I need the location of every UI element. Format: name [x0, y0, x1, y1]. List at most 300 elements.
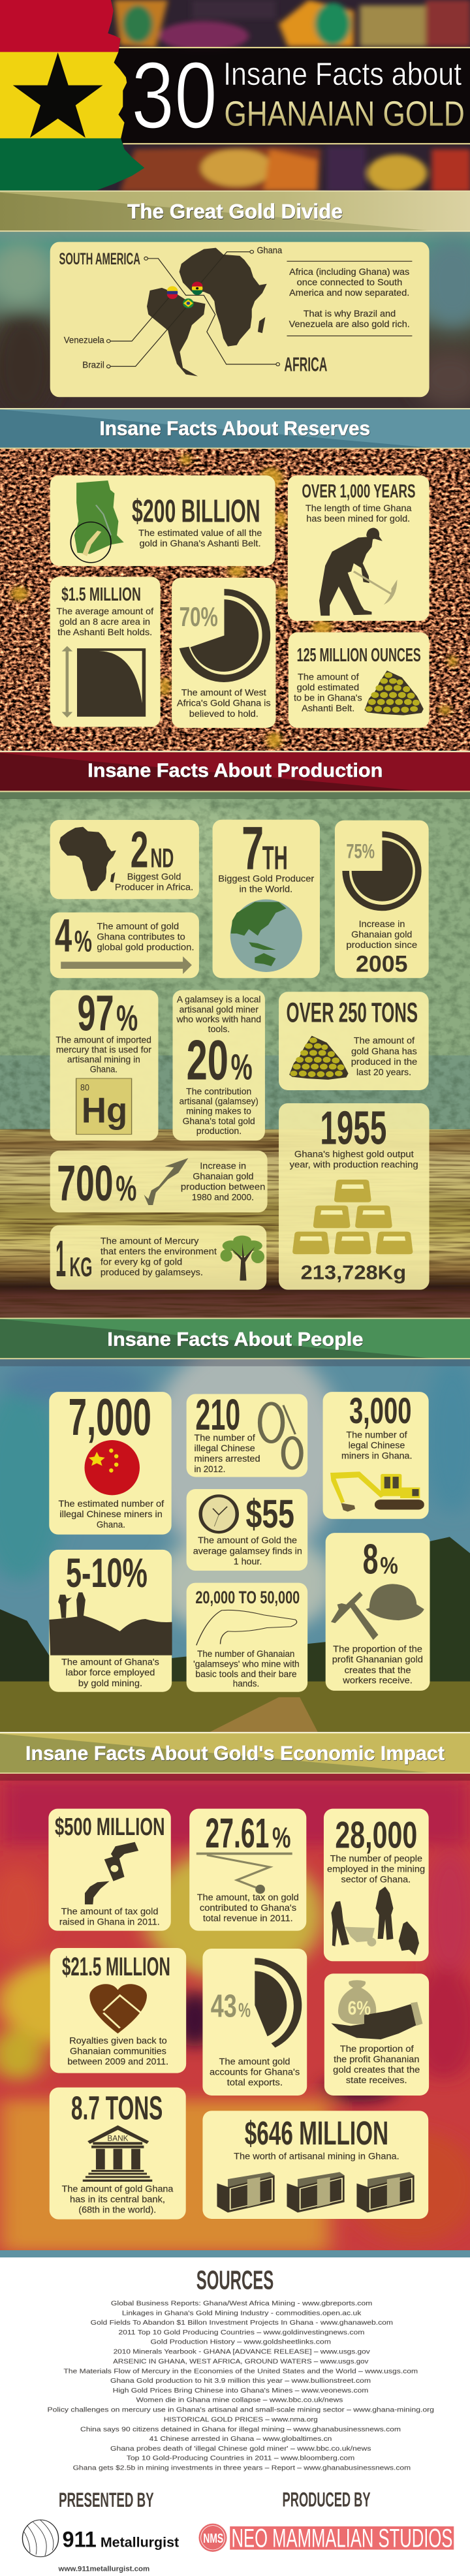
sources list: Top 10 Gold-Producing Countries in 2011 – www.bloomberg.com [127, 2454, 354, 2462]
callout lines [106, 250, 279, 368]
text: Increase in [359, 919, 405, 929]
text: Ghana's total gold [183, 1116, 255, 1126]
number: 70% [180, 602, 218, 633]
text: 1980 and 2000. [192, 1193, 254, 1202]
panel: 75%: 75% [346, 840, 375, 863]
number [57, 1155, 136, 1212]
icon: gold bars [292, 1180, 413, 1254]
icon: gold pile [289, 1036, 349, 1080]
panel: 2nd: ND [151, 842, 174, 873]
sources list: HISTORICAL GOLD PRICES – www.nma.org [164, 2415, 318, 2423]
gold nugget background [0, 448, 470, 753]
band: Insane Facts About People: Insane Facts About People [107, 1328, 364, 1350]
text: The amount of [354, 1036, 415, 1046]
flag: Ghana [192, 281, 202, 295]
number: 7 [242, 814, 264, 883]
text: the Ashanti Belt holds. [57, 628, 152, 637]
icon: money bag and hand: 6% [348, 1997, 371, 2019]
text [62, 2184, 174, 2215]
number: 4 [55, 909, 72, 962]
text [180, 1087, 258, 1136]
text [59, 1500, 164, 1530]
icon: China flag [84, 1440, 140, 1495]
text [346, 919, 417, 950]
icon: gold pile [364, 670, 424, 715]
text: The amount of [298, 672, 359, 682]
text: Ghanaian gold [193, 1172, 253, 1182]
text: The amount of Gold the [198, 1536, 297, 1546]
sources list: 41 Chinese arrested in Ghana – www.globaltimes.cn [149, 2435, 332, 2442]
text [290, 1150, 418, 1170]
panel: 700%: % [116, 1169, 136, 1208]
number: 43 [211, 1987, 237, 2024]
band: Insane Facts About People [0, 1318, 470, 1359]
text block: explanation: Venezuela are also gold rich. [289, 320, 410, 330]
text: The amount of imported [55, 1035, 151, 1045]
title band [111, 47, 470, 144]
band: The Great Gold Divide [0, 191, 470, 232]
title text [131, 42, 465, 148]
text block: explanation: Africa (including Ghana) was [289, 268, 409, 277]
panel: 210: 210 [195, 1390, 240, 1439]
text [56, 607, 154, 637]
text [195, 1433, 260, 1474]
text: The estimated number of [59, 1500, 164, 1509]
sources list [48, 2299, 434, 2472]
text: gold creates that the [333, 2065, 420, 2075]
text: artisanal mining in [67, 1055, 140, 1065]
map: South America [147, 288, 206, 376]
text: the profit Ghananian [334, 2054, 419, 2064]
text [351, 1036, 417, 1077]
text: Ghana. [90, 1065, 118, 1075]
number: 5-10% [66, 1550, 148, 1596]
text: mercury that is used for [56, 1045, 151, 1055]
text [306, 504, 412, 524]
text: The number of [346, 1430, 407, 1440]
panel: 27.61% [189, 1809, 306, 1931]
text block: explanation: America and now separated. [289, 289, 409, 298]
icon: miner [319, 528, 397, 616]
title text: 30 [131, 42, 217, 148]
text: The amount of Mercury [101, 1236, 199, 1246]
text: Biggest Gold [127, 872, 181, 882]
panel: over 250 tons [279, 992, 429, 1090]
panel: 70% [172, 578, 275, 728]
text: for every kg of gold [101, 1257, 182, 1267]
text: gold Ghana has [351, 1046, 417, 1056]
text: gold estimated [297, 683, 359, 693]
panel: 7th: TH [262, 840, 288, 877]
text: The amount of gold Ghana [62, 2184, 174, 2194]
text [101, 1236, 217, 1278]
star [13, 52, 103, 138]
website: www.911metallurgist.com [58, 2564, 149, 2573]
text block: explanation [287, 261, 412, 336]
gold bars background [0, 1773, 470, 2252]
sources list: Global Business Reports: Ghana/West Africa Mining - www.gbreports.com [111, 2299, 372, 2307]
panel: 1955 [279, 1101, 430, 1290]
panel: 7th [213, 814, 320, 978]
text [332, 1644, 423, 1686]
sources list: Gold Production History – www.goldsheetlinks.com [151, 2338, 331, 2346]
aerial city background [0, 230, 470, 418]
number: 2 [131, 821, 148, 879]
text [193, 1536, 302, 1567]
icon: Hg element [76, 1078, 132, 1135]
text: Ghana contributes to [97, 932, 185, 942]
text: by gold mining. [78, 1679, 142, 1688]
section: reserves [0, 408, 470, 753]
number: 213,728Kg [301, 1261, 406, 1283]
text: The amount gold [219, 2057, 290, 2067]
dividing line [148, 259, 275, 364]
logo: 911 Metallurgist: Metallurgist [101, 2535, 180, 2551]
text: definition: who works with hand [176, 1014, 261, 1024]
text: in 2012. [195, 1465, 225, 1474]
text [115, 872, 193, 892]
panel: 125 million ounces [289, 633, 430, 728]
text: The average amount of [56, 607, 154, 617]
text: The amount, tax on gold [197, 1893, 299, 1902]
panel: 700% [50, 1151, 268, 1212]
panel: 1kg [50, 1225, 266, 1290]
text: last 20 years. [356, 1067, 411, 1077]
paper and wood background [0, 791, 470, 1319]
text: profit Ghananian gold [332, 1655, 423, 1665]
text: labor force employed [66, 1668, 155, 1678]
arrow: growth [144, 1158, 188, 1205]
panel: 7,000 [49, 1389, 172, 1535]
number: 20 [187, 1028, 228, 1092]
icon: heart handshake [89, 1984, 147, 2034]
text: legal Chinese [349, 1441, 405, 1451]
year: 2005 [356, 951, 408, 977]
icon: cash bundles [217, 2172, 415, 2212]
icon: Hg element: Hg [82, 1090, 127, 1131]
section: sources and credits: PRESENTED BY [59, 2489, 154, 2511]
text: basic tools and their bare [195, 1670, 297, 1679]
panel: 1kg: KG [70, 1251, 92, 1282]
header banner [0, 0, 470, 192]
panel: $21.5 million: $21.5 MILLION [62, 1953, 170, 1981]
band: Insane Facts About Reserves [0, 408, 470, 448]
text: definition [176, 995, 261, 1034]
panel: 43% [202, 1949, 307, 2096]
logo: Neo Mammalian Studios: NMS [203, 2532, 223, 2546]
text: accounts for Ghana's [210, 2067, 300, 2077]
icon: globe [230, 900, 302, 972]
text [210, 2057, 300, 2088]
chart: 75% pie [342, 831, 422, 911]
text [97, 922, 195, 952]
label: South America: SOUTH AMERICA [59, 249, 140, 268]
text: Ghana's highest gold output [294, 1150, 414, 1159]
text [294, 672, 362, 714]
panel: 20,000 to 50,000 [187, 1583, 307, 1692]
logo: 911 Metallurgist [22, 2520, 180, 2557]
flag: Venezuela [167, 286, 178, 299]
panel: 8% [326, 1533, 430, 1691]
icon: acre diagram [62, 646, 146, 717]
panel: $200 billion [50, 475, 275, 566]
panel: 97% mercury: % [116, 997, 138, 1039]
sky and field background [0, 1341, 470, 1735]
heading: $1.5 MILLION [61, 584, 141, 605]
section: people [0, 1318, 470, 1735]
number: % [380, 1552, 398, 1579]
text: Biggest Gold Producer [218, 874, 315, 884]
text: The contribution [186, 1087, 251, 1097]
text: artisanal (galamsey) [180, 1097, 258, 1107]
icon: money exchange [85, 1842, 138, 1904]
text: The amount of tax gold [61, 1907, 158, 1917]
icon: workers [331, 1887, 419, 1955]
sources list: 2011 Top 10 Gold Producing Countries – www.goldinvestingnews.com [118, 2329, 364, 2336]
text: to be in Ghana's [294, 693, 362, 703]
sources list: Linkages in Ghana's Gold Mining Industry - commodities.open.ac.uk [122, 2309, 362, 2317]
panel: over 1,000 years [288, 475, 430, 621]
text [333, 2044, 420, 2085]
teal strip [0, 2250, 470, 2257]
text: mining makes to [186, 1107, 251, 1116]
text: average galamsey finds in [193, 1547, 302, 1556]
text [61, 1657, 159, 1688]
text [177, 688, 271, 719]
text: raised in Ghana in 2011. [59, 1917, 160, 1927]
text: Africa's Gold Ghana is [177, 699, 271, 708]
text [67, 2036, 168, 2067]
text: hands. [233, 1679, 259, 1689]
icon: Ghana map with belt [70, 480, 124, 563]
text [55, 1035, 151, 1075]
number: $55 [246, 1491, 294, 1536]
icon: clock [200, 1496, 237, 1532]
sources list: China says 90 citizens detained in Ghana for illegal mining – www.ghanabusinessnews.com [80, 2425, 401, 2433]
panel: $1.5 million [50, 577, 161, 727]
icon: Hg element: 80 [80, 1082, 89, 1093]
icon: Africa [59, 827, 116, 891]
band: Insane Facts About Production [0, 751, 470, 792]
number: 3,000 [349, 1390, 411, 1431]
icon: handcuffs [260, 1404, 301, 1468]
text: creates that the [345, 1666, 411, 1675]
icon: money bag and hand [331, 1980, 422, 2039]
panel: galamsey 20%: % [231, 1046, 253, 1088]
text: The number of [195, 1433, 255, 1443]
sources list: The Materials Flow of Mercury in the Economies of the United States and the World – www.usgs.com [63, 2367, 418, 2375]
icon: tree [221, 1236, 264, 1281]
arrow [61, 956, 192, 974]
text [218, 874, 315, 894]
text: in the World. [239, 885, 292, 894]
panel: $646 million [202, 2111, 428, 2219]
text: believed to hold. [189, 710, 258, 719]
text: The amount of gold [97, 922, 179, 932]
text: production between [181, 1182, 265, 1192]
text: The proportion of the [333, 1644, 422, 1654]
text: has in its central bank, [70, 2195, 165, 2205]
number: 8 [363, 1535, 379, 1583]
text: sector of Ghana. [341, 1875, 411, 1885]
band: Insane Facts About Reserves: Insane Facts About Reserves [99, 418, 370, 439]
sources list: Women die in Ghana mine collapse – www.bbc.co.uk/news [136, 2396, 343, 2404]
section: great gold divide [0, 191, 470, 418]
text [341, 1430, 412, 1461]
text [59, 1907, 160, 1927]
sources list: ARSENIC IN GHANA, WEST AFRICA, GROUND WATERS – www.usgs.gov [113, 2357, 369, 2365]
text: 1 hour. [234, 1557, 262, 1567]
sources list: 2010 Minerals Yearbook - GHANA [ADVANCE RELEASE] – www.usgs.gov [114, 2348, 370, 2355]
text: Ashanti Belt. [302, 704, 354, 714]
text: definition: artisanal gold miner [180, 1005, 258, 1014]
text: total revenue in 2011. [203, 1913, 293, 1923]
text: employed in the mining [327, 1864, 425, 1874]
chart: decline line [196, 1853, 292, 1894]
text: contributed to Ghana's [200, 1903, 296, 1913]
country labels [64, 246, 282, 370]
panel: galamsey 20% [172, 990, 265, 1140]
number: 1 [55, 1230, 66, 1287]
text: The proportion of [340, 2044, 414, 2054]
text: miners arrested [195, 1454, 260, 1464]
sources list: Gold Fields To Abandon $1 Billon Investment Projects In Ghana - www.ghanaweb.com [91, 2319, 393, 2326]
text: Ghana. [97, 1520, 125, 1530]
label: Africa: AFRICA [284, 353, 327, 375]
text: Ghanaian gold [351, 930, 412, 939]
panel: 43%: % [238, 1998, 251, 2021]
map: Africa [180, 248, 267, 347]
panel: 3,000 [323, 1390, 429, 1519]
text: The amount of Ghana's [61, 1657, 159, 1667]
logo: 911 Metallurgist: 911 [63, 2527, 97, 2552]
text: definition: tools. [208, 1024, 230, 1034]
text: that enters the environment [101, 1247, 217, 1257]
heading: 20,000 TO 50,000 [195, 1588, 300, 1607]
panel: 75% [335, 821, 429, 978]
flag: Brazil [183, 298, 194, 308]
panel: $21.5 million [50, 1948, 186, 2073]
text: production since [346, 940, 417, 950]
text: illegal Chinese [195, 1444, 255, 1453]
text [197, 1893, 299, 1923]
text: definition: A galamsey is a local [177, 995, 261, 1005]
panel: $200 billion: $200 BILLION [132, 493, 260, 529]
panel: 6% [324, 1973, 429, 2096]
Ghana flag map [0, 0, 144, 191]
text: production. [196, 1126, 242, 1136]
text: 'galamseys' who mine with [193, 1659, 300, 1669]
text: The length of time Ghana [306, 504, 412, 513]
sources list: High Gold Prices Bring Chinese into Ghana's Mines – www.veonews.com [113, 2387, 368, 2394]
icon: miners on hill [49, 1592, 172, 1656]
panel: 5-10% [49, 1550, 172, 1692]
text: The estimated value of all the [138, 529, 262, 539]
panel: 8.7 tons [50, 2088, 186, 2220]
panel: 4% [50, 909, 199, 978]
country labels: Ghana [257, 246, 282, 256]
section: sources and credits: SOURCES [196, 2265, 274, 2295]
icon: bank [83, 2126, 152, 2182]
text: gold in Ghana's Ashanti Belt. [140, 539, 261, 548]
panel: $500 million [48, 1809, 171, 1931]
panel: 4%: % [74, 924, 92, 958]
section: production [0, 751, 470, 1319]
panel: 97% mercury [50, 985, 158, 1140]
icon: excavator [330, 1471, 424, 1512]
text block: explanation: once connected to South [297, 277, 402, 288]
sources list: Ghana Gold production to hit 3.9 million this year – www.bullionstreet.com [110, 2377, 371, 2384]
text: Producer in Africa. [115, 883, 193, 892]
number [206, 1810, 290, 1857]
text: The number of people [330, 1854, 422, 1864]
section: economic impact [0, 1733, 470, 2257]
panel: 2nd [50, 820, 199, 899]
text: Increase in [200, 1161, 246, 1171]
text: total exports. [227, 2078, 283, 2088]
panel: 7,000: 7,000 [69, 1389, 151, 1446]
text: between 2009 and 2011. [67, 2057, 168, 2067]
text: gold an 8 acre area in [59, 618, 150, 627]
sources list: Ghana gets $2.5b in mining investments in three years – Report – www.ghanabusinessnews.com [73, 2464, 411, 2472]
text [193, 1650, 300, 1689]
text: global gold production. [97, 943, 195, 952]
band: Gold's Economic Impact [0, 1733, 470, 1774]
text: (68th in the world). [78, 2205, 156, 2215]
chart: 43% pie [255, 1958, 302, 2048]
text: produced by galamseys. [101, 1268, 203, 1278]
text: produced in the [351, 1057, 417, 1067]
number: % [272, 1822, 290, 1854]
sources list: Ghana probes death of 'illegal Chinese gold miner' – www.bbc.co.uk/news [110, 2445, 371, 2452]
panel: 1955: 1955 [320, 1101, 386, 1154]
panel: continents card [50, 242, 430, 397]
icon: open hand [196, 1610, 297, 1645]
panel: $55 [187, 1489, 307, 1571]
text: miners in Ghana. [341, 1451, 412, 1461]
panel: 28,000 [324, 1809, 429, 1961]
text [138, 529, 262, 548]
text: Royalties given back to [69, 2036, 167, 2046]
number: 97 [77, 985, 114, 1041]
text: Ghanaian communities [70, 2047, 166, 2056]
text: workers receive. [342, 1676, 413, 1686]
number: 27.61 [206, 1810, 269, 1857]
number: 700 [57, 1155, 114, 1212]
text: has been mined for gold. [306, 514, 410, 524]
text: The worth of artisanal mining in Ghana. [234, 2152, 400, 2161]
band: The Great Gold Divide: The Great Gold Divide [127, 200, 343, 223]
text: state receives. [346, 2075, 407, 2085]
kente cloth background [0, 0, 470, 192]
icon: helmet and pick [331, 1584, 424, 1640]
text [327, 1854, 425, 1885]
panel: $500 million: $500 MILLION [55, 1813, 165, 1840]
country labels: Venezuela [64, 336, 104, 345]
panel: 210 [187, 1390, 307, 1477]
text: The number of Ghanaian [197, 1650, 294, 1659]
section: sources and credits [22, 2265, 454, 2573]
icon: bank: BANK [107, 2134, 129, 2143]
text: The amount of West [181, 688, 266, 698]
text: year, with production reaching [290, 1160, 418, 1170]
panel: 8.7 tons: 8.7 TONS [71, 2090, 163, 2127]
text [181, 1161, 265, 1202]
text block: explanation: That is why Brazil and [304, 309, 396, 319]
text: illegal Chinese miners in [59, 1510, 163, 1519]
chart: 70% pie [180, 589, 270, 682]
country labels: Brazil [82, 360, 104, 370]
